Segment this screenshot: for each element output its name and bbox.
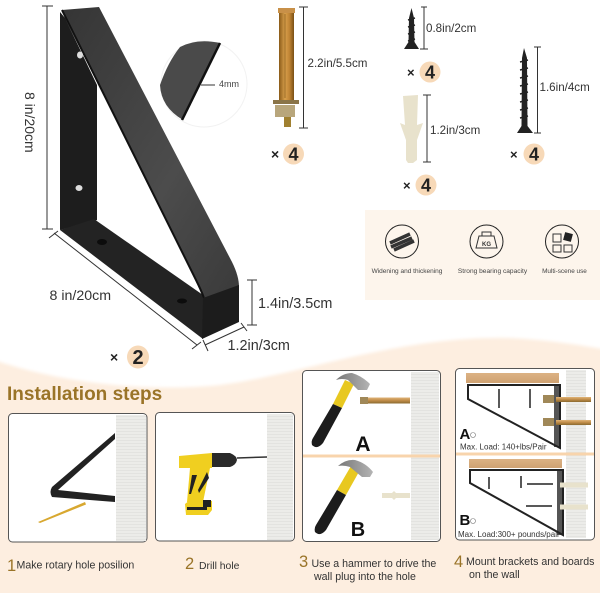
quantity: brackets x2 [110, 346, 149, 369]
dimension: bracket depth [203, 323, 290, 354]
step 2 caption: Drill hole [199, 561, 240, 572]
dimension: short screw [420, 7, 476, 49]
step 3 caption: wall plug into the hole [313, 571, 416, 583]
dimension: bracket height: 8 in/20cm [22, 92, 38, 153]
step 4 caption [454, 553, 594, 581]
quantity: anchors x4 [271, 144, 304, 164]
bracket B [470, 470, 563, 535]
step 4 caption: 4 [454, 553, 463, 571]
dimension: wall plug: 1.2in/3cm [430, 124, 480, 137]
quantity: short screws x4 [407, 62, 440, 82]
step 4 caption: on the wall [469, 569, 520, 581]
step 2 caption [185, 555, 240, 573]
anchors A [499, 389, 591, 426]
step 1 caption [7, 557, 134, 575]
hammer A [312, 373, 370, 447]
dimension: bracket length [49, 231, 201, 349]
quantity: brackets x2: 2 [132, 347, 144, 369]
step 2 caption: 2 [185, 555, 194, 573]
panel: step 2 image [156, 412, 294, 541]
load B: Max. Load:300+ pounds/pair [458, 530, 560, 539]
feature: strong bearing capacity: Strong bearing capacity [458, 268, 528, 275]
quantity: brackets x2: × [110, 349, 118, 365]
label B: B [351, 519, 365, 541]
plugs B [489, 476, 588, 510]
feature: widening and thickening [372, 225, 443, 275]
label: option B [460, 512, 476, 529]
dimension: bracket width: 1.4in/3.5cm [258, 296, 332, 312]
panel: step 4 image [456, 368, 594, 540]
quantity: long screws x4: × [510, 147, 518, 162]
quantity: short screws x4: 4 [425, 62, 435, 82]
panel: step 1 image [8, 414, 147, 542]
quantity: anchors x4: 4 [288, 144, 299, 164]
anchor A [360, 397, 410, 404]
quantity: long screws x4 [510, 144, 544, 164]
step 1 caption: Make rotary hole posilion [16, 560, 134, 572]
feature: strong bearing capacity: KG [482, 242, 491, 248]
dimension: wall plug [423, 95, 480, 162]
dimension: long screw [534, 47, 590, 133]
dimension: anchor bolt: 2.2in/5.5cm [308, 57, 367, 70]
detail callout: 4mm thickness: 4mm [219, 79, 239, 89]
panel: step 3 image [302, 370, 440, 542]
background band [0, 338, 600, 600]
panel: features [365, 210, 600, 300]
short screw [404, 8, 419, 49]
dimension: long screw: 1.6in/4cm [540, 81, 590, 94]
quantity: anchors x4: × [271, 146, 279, 162]
quantity: wall plugs x4: × [403, 178, 411, 193]
load A: Max. Load: 140+lbs/Pair [460, 442, 547, 452]
feature: multi-scene use [542, 225, 587, 275]
label: option A [460, 426, 476, 443]
dimension: bracket depth: 1.2in/3cm [228, 338, 290, 354]
dimension: short screw: 0.8in/2cm [426, 22, 476, 35]
label: option B: B [460, 512, 470, 529]
step 3 caption: Use a hammer to drive the [312, 558, 436, 570]
step 3 caption [299, 553, 436, 583]
dimension: anchor bolt [299, 7, 367, 128]
quantity: wall plugs x4: 4 [421, 176, 431, 196]
feature: strong bearing capacity [458, 225, 528, 275]
bracket photo [60, 7, 239, 339]
feature: widening and thickening: Widening and thickening [372, 268, 443, 275]
heading: installation steps: Installation steps [7, 384, 162, 405]
bracket A [468, 385, 560, 448]
shelf B [469, 459, 562, 468]
hammer B [315, 460, 373, 534]
step 3 caption: 3 [299, 553, 308, 571]
anchor bolt [273, 8, 299, 127]
step 4 caption: Mount brackets and boards [466, 556, 594, 568]
dimension: bracket length: 8 in/20cm [50, 288, 111, 304]
dimension: bracket width [247, 280, 332, 325]
long screw [517, 48, 533, 133]
wall plug [400, 95, 423, 163]
quantity: long screws x4: 4 [529, 144, 539, 164]
detail callout: 4mm thickness [160, 41, 247, 127]
quantity: wall plugs x4 [403, 174, 436, 196]
step 1 caption: 1 [7, 557, 16, 575]
wall plug B [382, 491, 410, 500]
feature: multi-scene use: Multi-scene use [542, 268, 587, 275]
label: option A: A [460, 426, 470, 443]
dimension: bracket height [22, 6, 53, 229]
shelf A [466, 373, 559, 383]
label A: A [355, 433, 371, 456]
quantity: short screws x4: × [407, 65, 415, 80]
